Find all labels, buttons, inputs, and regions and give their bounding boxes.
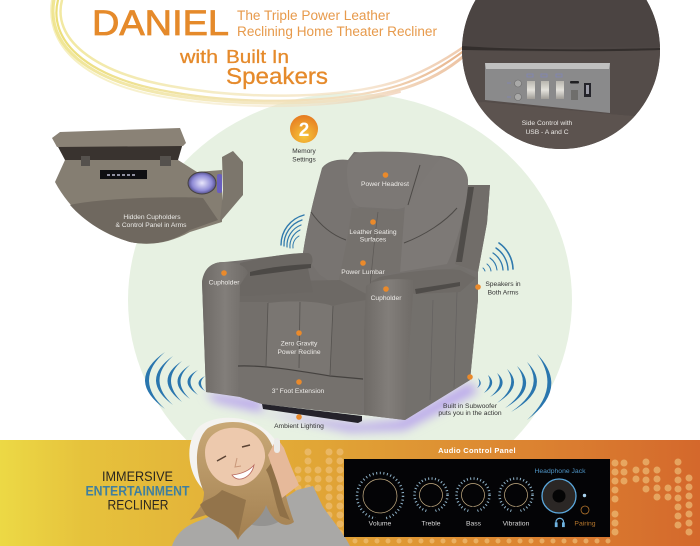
immersive heading: IMMERSIVE bbox=[102, 469, 173, 484]
feature labels on background bbox=[274, 281, 521, 430]
feature labels on chair: Zero Gravity bbox=[281, 340, 318, 348]
side control caption: Side Control with bbox=[522, 120, 573, 127]
headphone icon bbox=[555, 518, 564, 526]
control labels: Vibration bbox=[503, 520, 530, 528]
treble knob bbox=[414, 478, 448, 512]
feature labels on chair bbox=[209, 181, 409, 395]
round memory buttons bbox=[514, 80, 522, 87]
subtitle bbox=[237, 8, 438, 39]
control labels bbox=[369, 520, 530, 528]
headrest bbox=[347, 152, 441, 209]
feature labels on background: puts you in the action bbox=[438, 410, 502, 417]
feature labels on background: Ambient Lighting bbox=[274, 423, 324, 430]
sound wave: lower left bbox=[145, 352, 205, 409]
left arm top bbox=[238, 253, 313, 296]
feature labels on chair: 3" Foot Extension bbox=[272, 388, 325, 395]
center back bbox=[336, 208, 404, 297]
inset: hidden cupholders bbox=[52, 128, 243, 244]
hair bbox=[190, 422, 294, 540]
memory settings badge: 2 bbox=[299, 120, 309, 141]
left wing bbox=[303, 160, 360, 298]
immersive heading: ENTERTAINMENT bbox=[86, 484, 190, 498]
feature labels on background: Speakers in bbox=[485, 281, 521, 288]
feature labels on chair: Cupholder bbox=[209, 280, 240, 286]
sweater bbox=[172, 486, 350, 546]
sound wave: upper left bbox=[281, 215, 304, 248]
smile bbox=[232, 465, 254, 479]
headphone jack label: Headphone Jack bbox=[534, 468, 586, 475]
hand bbox=[268, 438, 299, 498]
seat cushions bbox=[238, 302, 268, 366]
equalizer dots bbox=[298, 452, 689, 541]
with built in speakers: Speakers bbox=[226, 63, 328, 89]
inset: side control panel bbox=[460, 0, 662, 150]
side control caption: USB - A and C bbox=[525, 129, 569, 136]
title: DANIEL: DANIEL bbox=[92, 4, 229, 43]
control panel bbox=[100, 170, 147, 179]
purple light bbox=[217, 174, 222, 193]
woman with headphones bbox=[172, 418, 350, 546]
illuminated cup bbox=[188, 172, 216, 194]
feature labels on chair: Power Lumbar bbox=[341, 269, 386, 276]
with built in speakers bbox=[179, 46, 328, 89]
outer side of right arm bbox=[399, 266, 478, 420]
footrest base bbox=[262, 404, 362, 423]
subtitle: The Triple Power Leather bbox=[237, 8, 390, 23]
with built in speakers: Built In bbox=[226, 46, 289, 67]
right wing bbox=[400, 157, 468, 272]
lid underside bbox=[57, 143, 183, 160]
back seams bbox=[311, 165, 457, 243]
recliner chair bbox=[202, 152, 490, 423]
control labels: Bass bbox=[466, 520, 482, 528]
foot extension bbox=[238, 367, 363, 415]
back panel bbox=[455, 185, 490, 272]
chair silhouette bbox=[202, 152, 490, 420]
volume knob bbox=[357, 473, 403, 519]
hidden cupholders caption: & Control Panel in Arms bbox=[116, 222, 187, 229]
feature dots bbox=[221, 172, 481, 420]
usb ports bbox=[570, 81, 579, 84]
side control caption bbox=[522, 120, 573, 136]
feature labels on chair: Power Headrest bbox=[361, 181, 409, 188]
headphone cup bbox=[274, 438, 280, 453]
lid bbox=[52, 128, 186, 147]
audio control panel bbox=[344, 446, 610, 537]
hidden cupholders caption: Hidden Cupholders bbox=[123, 214, 181, 221]
subtitle: Reclining Home Theater Recliner bbox=[237, 24, 438, 39]
hidden cupholders caption bbox=[116, 214, 187, 229]
feature labels on background: Both Arms bbox=[488, 290, 519, 296]
right arm bbox=[220, 151, 243, 222]
eyes bbox=[217, 445, 250, 461]
immersive heading: RECLINER bbox=[108, 498, 169, 512]
control labels: Volume bbox=[369, 520, 392, 528]
upper leather shade bbox=[460, 0, 662, 47]
panel body bbox=[344, 459, 610, 537]
feature labels on chair: Surfaces bbox=[360, 236, 387, 244]
hinges bbox=[81, 156, 90, 166]
right arm top bbox=[370, 269, 476, 294]
feature labels on chair: Leather Seating bbox=[349, 229, 397, 236]
panel title: Audio Control Panel bbox=[438, 446, 516, 455]
face bbox=[205, 428, 265, 486]
seat and arm body bbox=[55, 160, 222, 244]
bass knob bbox=[456, 478, 490, 512]
sound wave: lower right bbox=[477, 354, 551, 420]
tick gaps at bottom of knobs bbox=[372, 506, 523, 522]
sound wave: right arm bbox=[483, 243, 513, 271]
pairing label: Pairing bbox=[574, 520, 596, 528]
feature labels on chair: Cupholder bbox=[371, 295, 402, 302]
immersive heading bbox=[86, 469, 190, 512]
right arm front bbox=[364, 279, 413, 420]
decorative ribbon swoosh bbox=[51, 0, 465, 106]
feature labels on background: Built in Subwoofer bbox=[443, 403, 498, 410]
feature labels on chair: Power Recline bbox=[277, 349, 321, 356]
blue button legends bbox=[507, 74, 562, 97]
white headphone arc bbox=[189, 418, 279, 492]
control band bbox=[462, 50, 660, 118]
with built in speakers: with bbox=[179, 47, 218, 67]
bottom band bbox=[0, 440, 700, 546]
pairing indicators bbox=[583, 494, 586, 497]
title block bbox=[92, 4, 438, 89]
memory settings badge: Settings bbox=[292, 156, 316, 164]
vibration knob bbox=[500, 478, 532, 512]
memory settings badge bbox=[290, 115, 318, 164]
control plate bbox=[485, 63, 610, 113]
ambient lighting glow bbox=[205, 382, 478, 432]
seat top bbox=[238, 280, 370, 312]
nose bbox=[235, 458, 241, 467]
memory settings badge: Memory bbox=[292, 148, 316, 155]
rocker buttons bbox=[527, 81, 535, 99]
left arm front bbox=[202, 262, 248, 396]
headphone jack bbox=[542, 479, 576, 513]
lower leather bbox=[477, 102, 635, 149]
green backdrop circle bbox=[128, 93, 572, 507]
control labels: Treble bbox=[421, 520, 441, 528]
